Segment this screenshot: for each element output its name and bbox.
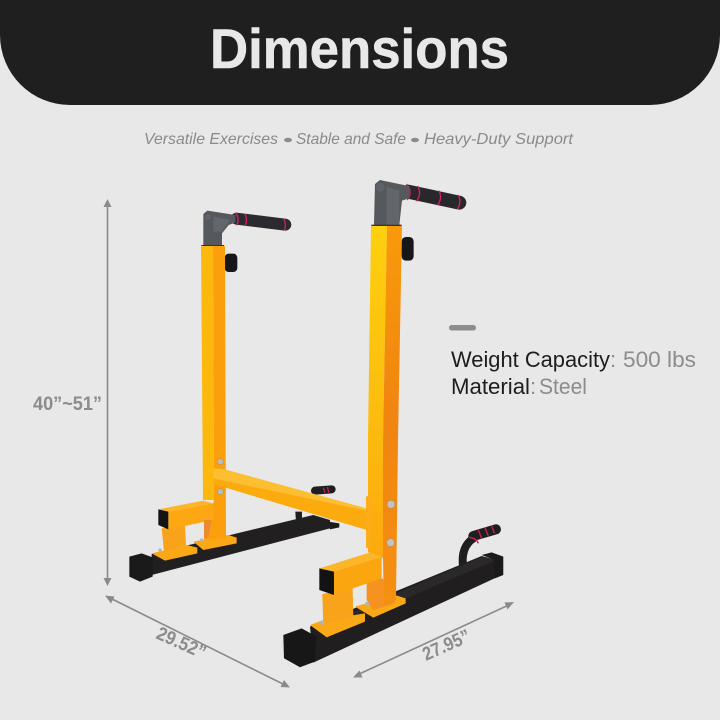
width label: 29.52” <box>153 623 209 664</box>
left foot and crossbar <box>158 459 367 539</box>
subtitle: feature list: Stable and Safe <box>296 131 406 148</box>
subtitle: feature list <box>144 131 574 148</box>
spec dash <box>449 325 476 330</box>
width dimension arrow <box>105 596 290 688</box>
left knob <box>225 254 237 272</box>
header banner <box>0 0 720 105</box>
specs block: Steel <box>539 374 587 399</box>
specs block: : <box>530 374 536 399</box>
specs block: Material <box>451 374 530 399</box>
far rail <box>129 487 339 582</box>
near handle <box>463 538 474 568</box>
right foot box and bolts <box>319 495 395 595</box>
specs block: Weight Capacity <box>451 347 610 372</box>
height dimension arrow <box>104 199 112 586</box>
title: Dimensions <box>210 17 509 80</box>
right knob <box>402 237 414 261</box>
depth label: 27.95” <box>419 626 474 666</box>
specs block <box>449 325 696 399</box>
specs block: : <box>610 347 616 372</box>
right post <box>368 226 402 606</box>
depth dimension arrow <box>353 602 514 678</box>
right upper handle <box>371 180 460 261</box>
crossbar <box>213 468 367 530</box>
left upper handle <box>201 211 285 272</box>
left post <box>201 246 226 540</box>
specs block: 500 lbs <box>623 347 696 372</box>
subtitle: feature list: Heavy-Duty Support <box>424 131 574 148</box>
far handle <box>315 489 332 491</box>
height label: 40”~51” <box>33 394 102 415</box>
left foot box <box>158 501 213 512</box>
near rail and foot <box>283 526 503 667</box>
dip station product illustration <box>129 180 503 667</box>
subtitle: feature list: Versatile Exercises <box>144 131 278 148</box>
